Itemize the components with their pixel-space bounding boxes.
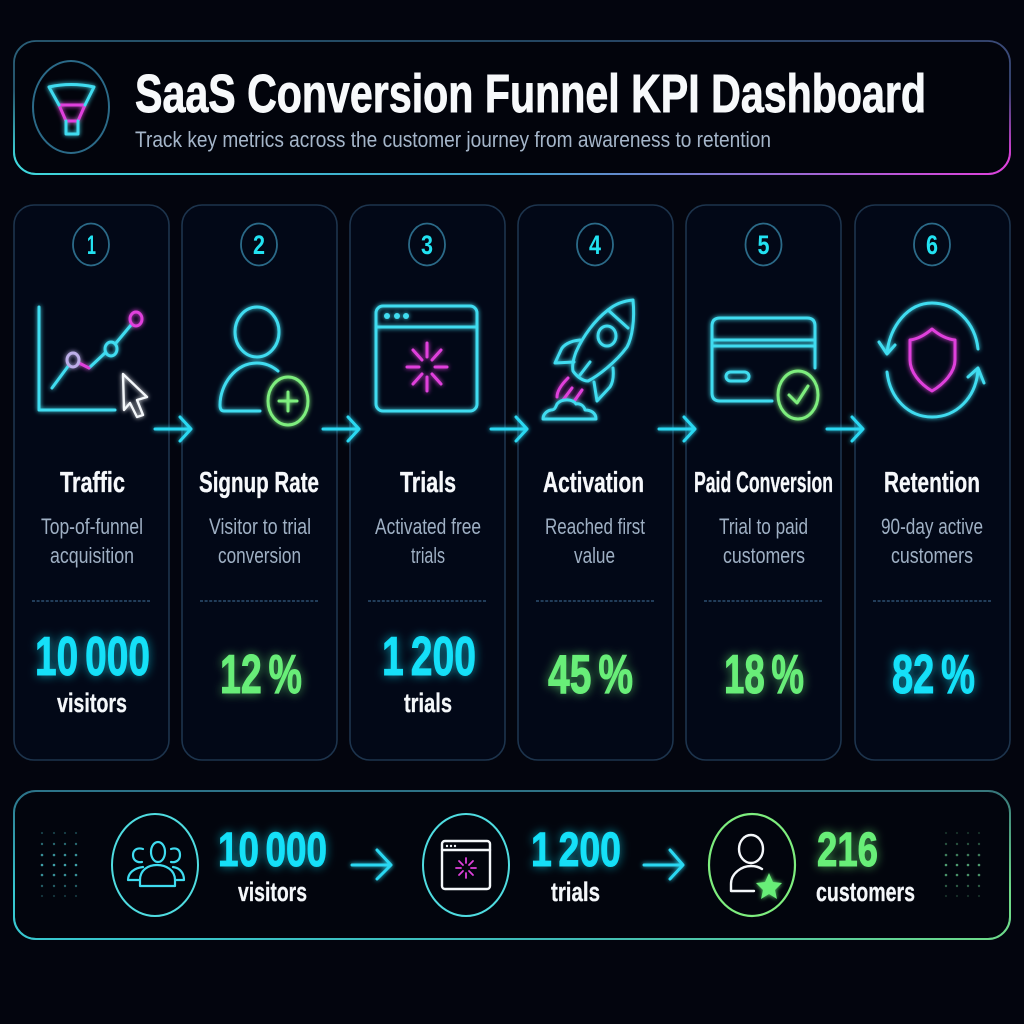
- metric: 18 %: 18 %: [724, 643, 804, 705]
- step number 3: 3: [421, 230, 433, 260]
- heading: activation: Activation: [543, 467, 644, 499]
- description: trials: Activated free: [375, 514, 481, 539]
- step number 6: 6: [926, 230, 938, 260]
- icon: funnel: [33, 61, 109, 153]
- metric: 10 000 visitors: 10 000: [218, 824, 327, 877]
- description: traffic: Top-of-funnel: [41, 514, 143, 539]
- arrow: step 4 to 5: [659, 417, 695, 441]
- metric: 216 customers: [816, 824, 915, 907]
- metric: 10 000 visitors: visitors: [238, 877, 307, 907]
- description: signup rate: Visitor to trial: [209, 514, 311, 539]
- step number 4: 4: [589, 230, 601, 260]
- step number 6: [914, 224, 950, 266]
- arrow: step 5 to 6: [827, 417, 863, 441]
- metric: 1 200 trials: 1 200: [531, 824, 621, 877]
- decorative dot grid left: [41, 832, 77, 897]
- step number 4: [577, 224, 613, 266]
- step number 2: [241, 224, 277, 266]
- description: traffic: [41, 514, 143, 568]
- metric: 10 000 visitors: visitors: [57, 688, 127, 718]
- panel: traffic: [14, 205, 169, 760]
- arrow: trials to customers: [644, 850, 683, 879]
- description: activation: Reached first: [545, 514, 645, 539]
- heading: retention: Retention: [884, 467, 980, 499]
- step number 3: [409, 224, 445, 266]
- step number 2: 2: [253, 230, 265, 260]
- step number 1: 1: [87, 230, 96, 260]
- arrow: visitors to trials: [352, 850, 391, 879]
- panel: funnel summary: [14, 791, 1010, 939]
- arrow: step 2 to 3: [323, 417, 359, 441]
- metric: 1 200 trials: [531, 824, 621, 907]
- step number 1: [73, 224, 109, 266]
- description: activation: value: [574, 543, 615, 568]
- description: paid conversion: Trial to paid: [719, 514, 808, 539]
- heading: paid conversion: Paid Conversion: [694, 467, 833, 499]
- heading: traffic: Traffic: [60, 467, 125, 499]
- description: retention: 90-day active: [881, 514, 983, 539]
- heading: trials: Trials: [400, 467, 456, 499]
- step number 5: [746, 224, 782, 266]
- panel: retention: [855, 205, 1010, 760]
- decorative dot grid right: [945, 832, 980, 897]
- description: activation: [545, 514, 645, 568]
- icon: traffic chart with cursor: [39, 307, 147, 417]
- panel: activation: [518, 205, 673, 760]
- metric: 12 %: 12 %: [220, 643, 302, 705]
- description: signup rate: conversion: [218, 543, 301, 568]
- icon: trials window: [423, 814, 509, 916]
- metric: 1 200 trials: trials: [551, 877, 600, 907]
- description: signup rate: [209, 514, 311, 568]
- panel: paid conversion: [686, 205, 841, 760]
- metric: 45 %: 45 %: [548, 643, 633, 705]
- panel: signup rate: [182, 205, 337, 760]
- description: trials: trials: [411, 543, 445, 568]
- metric: 10 000 visitors: [218, 824, 327, 907]
- header panel: [14, 41, 1010, 174]
- description: paid conversion: [719, 514, 808, 568]
- metric: 10 000 visitors: 10 000: [35, 625, 150, 687]
- metric: 82 %: 82 %: [892, 643, 975, 705]
- icon: user with plus: [220, 307, 308, 425]
- description: retention: customers: [891, 543, 973, 568]
- icon: browser window with spinner: [376, 306, 477, 411]
- arrow: step 3 to 4: [491, 417, 527, 441]
- metric: 216 customers: 216: [817, 824, 878, 877]
- subtitle: Track key metrics across the customer journey from awareness to retention: [135, 127, 771, 152]
- description: traffic: acquisition: [50, 543, 134, 568]
- icon: customer with star: [709, 814, 795, 916]
- description: paid conversion: customers: [723, 543, 805, 568]
- metric: 1 200 trials: 1 200: [382, 625, 476, 687]
- metric: 1 200 trials: [382, 625, 476, 718]
- step number 5: 5: [758, 230, 770, 260]
- metric: 216 customers: customers: [816, 877, 915, 907]
- panel: trials: [350, 205, 505, 760]
- icon: credit card with check: [712, 318, 818, 419]
- metric: 1 200 trials: trials: [404, 688, 452, 718]
- icon: visitors group: [112, 814, 198, 916]
- heading: signup rate: Signup Rate: [199, 467, 319, 499]
- arrow: step 1 to 2: [155, 417, 191, 441]
- metric: 10 000 visitors: [35, 625, 150, 718]
- description: retention: [881, 514, 983, 568]
- icon: shield with cycle arrows: [879, 303, 984, 417]
- icon: rocket: [543, 300, 634, 419]
- description: trials: [375, 514, 481, 568]
